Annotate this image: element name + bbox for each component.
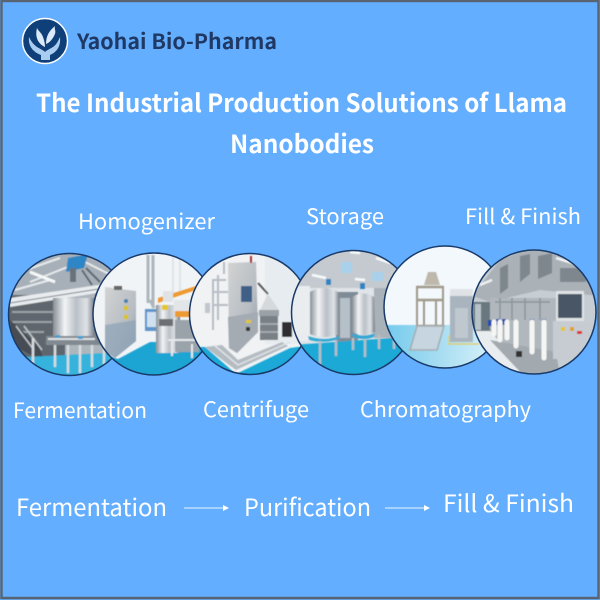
photo circle: chromatography (383, 245, 492, 369)
process step: fill and finish: Fill & Finish (443, 484, 574, 519)
photo circle: fill and finish (472, 250, 600, 376)
lower equipment labels: Centrifuge (203, 394, 309, 424)
logo icon (22, 18, 68, 64)
lower equipment labels: Chromatography (360, 394, 531, 424)
lower equipment labels: Fermentation (13, 395, 147, 425)
lower equipment labels (13, 394, 531, 425)
process step: purification: Purification (244, 488, 371, 523)
photo circle: fermentation (8, 252, 112, 376)
upper equipment labels: Storage (306, 201, 384, 231)
arrow: purification to fill and finish (385, 505, 430, 511)
title (36, 84, 567, 161)
photo circle: storage (290, 250, 402, 376)
upper equipment labels (78, 201, 581, 236)
upper equipment labels: Fill & Finish (465, 201, 581, 231)
arrow: fermentation to purification (184, 505, 229, 511)
photo circle: centrifuge (188, 252, 302, 376)
upper equipment labels: Homogenizer (78, 206, 216, 236)
photo circle: homogenizer (92, 252, 202, 376)
title: The Industrial Production Solutions of Llama (36, 84, 567, 120)
title: Nanobodies (230, 125, 374, 161)
brand name: Yaohai Bio-Pharma (76, 26, 277, 56)
process step: fermentation: Fermentation (16, 488, 167, 523)
